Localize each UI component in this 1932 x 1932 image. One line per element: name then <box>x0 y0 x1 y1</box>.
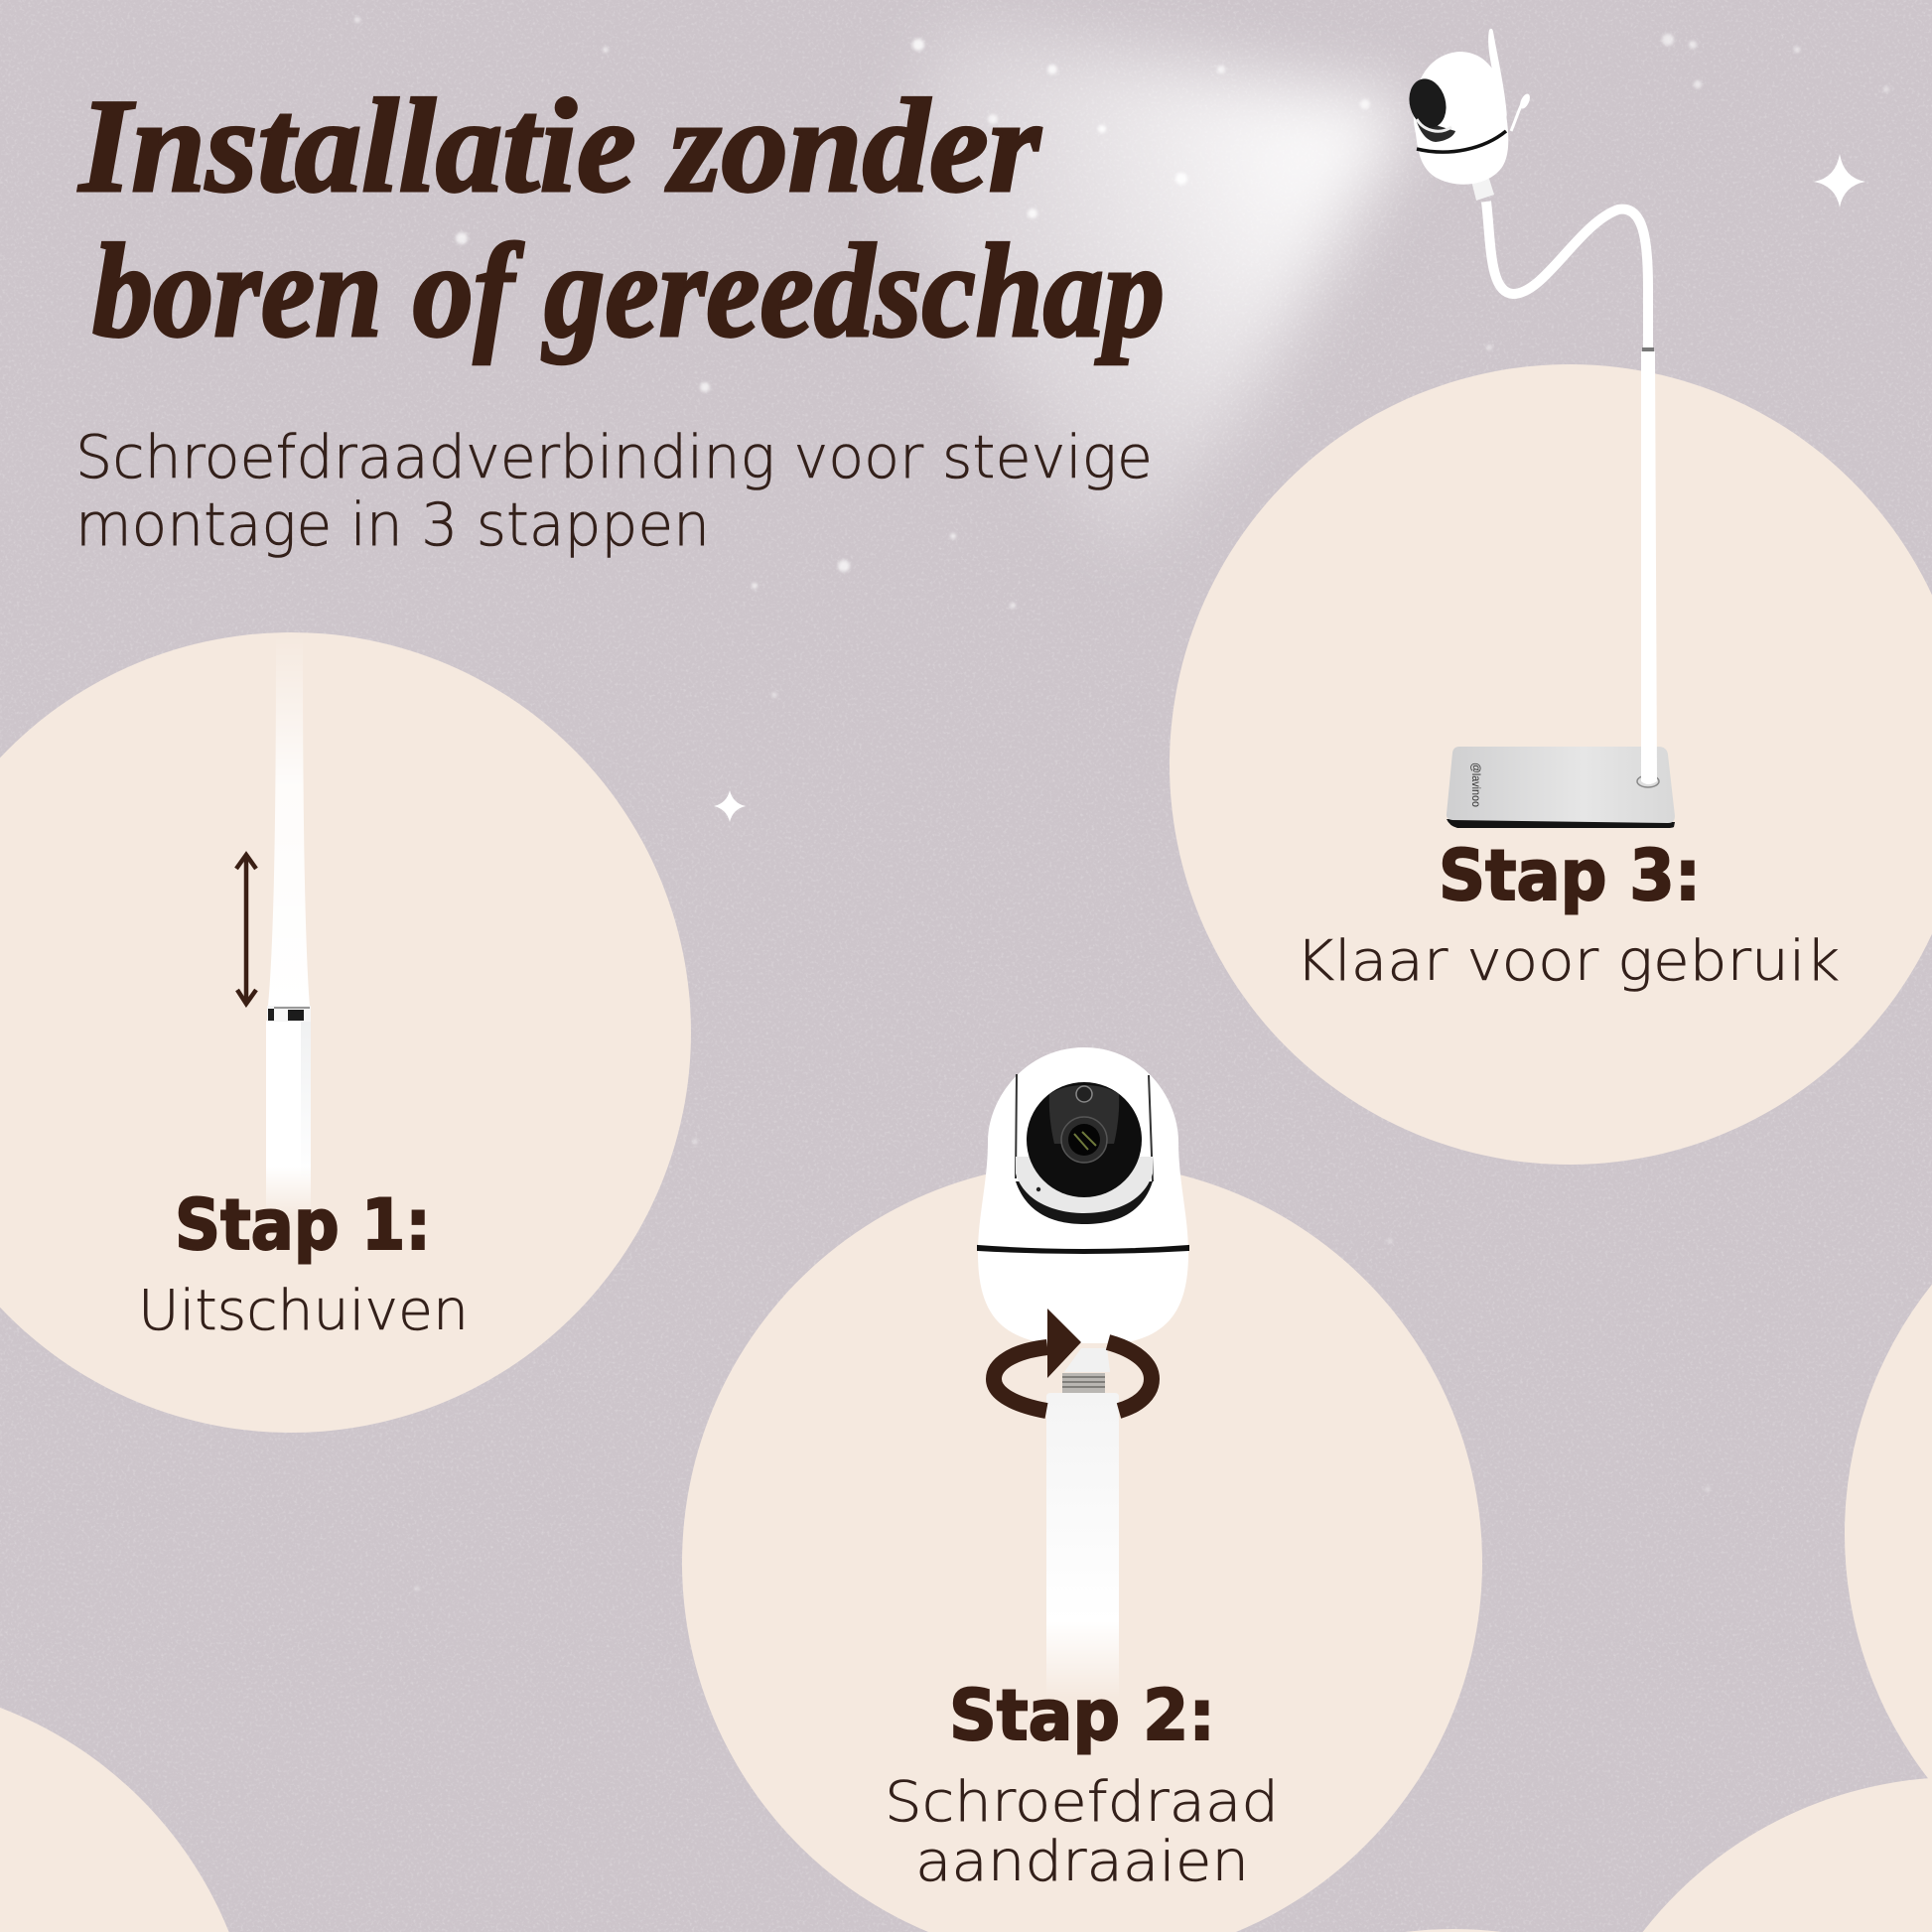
title: boren of gereedschap <box>92 217 1165 365</box>
title: Installatie zonder <box>77 72 1041 220</box>
camera, large <box>978 1047 1188 1343</box>
step 2 heading: Stap 2: <box>949 1675 1215 1756</box>
subtitle <box>75 423 1153 560</box>
decorative circle bottom left <box>0 1708 229 1932</box>
subtitle: Schroefdraadverbinding voor stevige <box>75 423 1153 492</box>
camera, small <box>1404 29 1532 201</box>
sparkle icon top right <box>1814 154 1865 207</box>
decorative circle right edge <box>1845 1285 1932 1783</box>
decorative circle bottom centre <box>1405 1929 1502 1932</box>
step 2 description <box>885 1770 1279 1894</box>
step 3 description: Klaar voor gebruik <box>1296 929 1840 994</box>
metal base plate <box>1447 747 1675 828</box>
screw thread <box>1062 1348 1110 1393</box>
stand pole <box>1641 351 1657 784</box>
step 2 description: aandraaien <box>915 1830 1249 1894</box>
panel: step 2 <box>682 1047 1482 1932</box>
rotation arrow <box>994 1309 1152 1411</box>
step 1 description: Uitschuiven <box>138 1279 469 1343</box>
telescopic rod, extended <box>266 635 311 1216</box>
decorative circle bottom right <box>1643 1778 1932 1932</box>
step 3 heading: Stap 3: <box>1439 835 1701 916</box>
brand logo: @lavinoo <box>1469 762 1483 807</box>
double-headed arrow <box>236 855 256 1004</box>
panel: step 3 <box>1170 29 1932 1165</box>
gooseneck <box>1486 202 1648 347</box>
title <box>77 72 1165 365</box>
subtitle: montage in 3 stappen <box>75 490 710 560</box>
step 2 description: Schroefdraad <box>885 1770 1279 1835</box>
pole <box>1046 1393 1119 1698</box>
light beam from camera <box>884 25 1415 566</box>
step 1 heading: Stap 1: <box>175 1184 431 1266</box>
panel: step 1 <box>0 632 691 1433</box>
sparkle icon middle <box>714 790 746 822</box>
scattered star specks <box>196 17 1889 1590</box>
